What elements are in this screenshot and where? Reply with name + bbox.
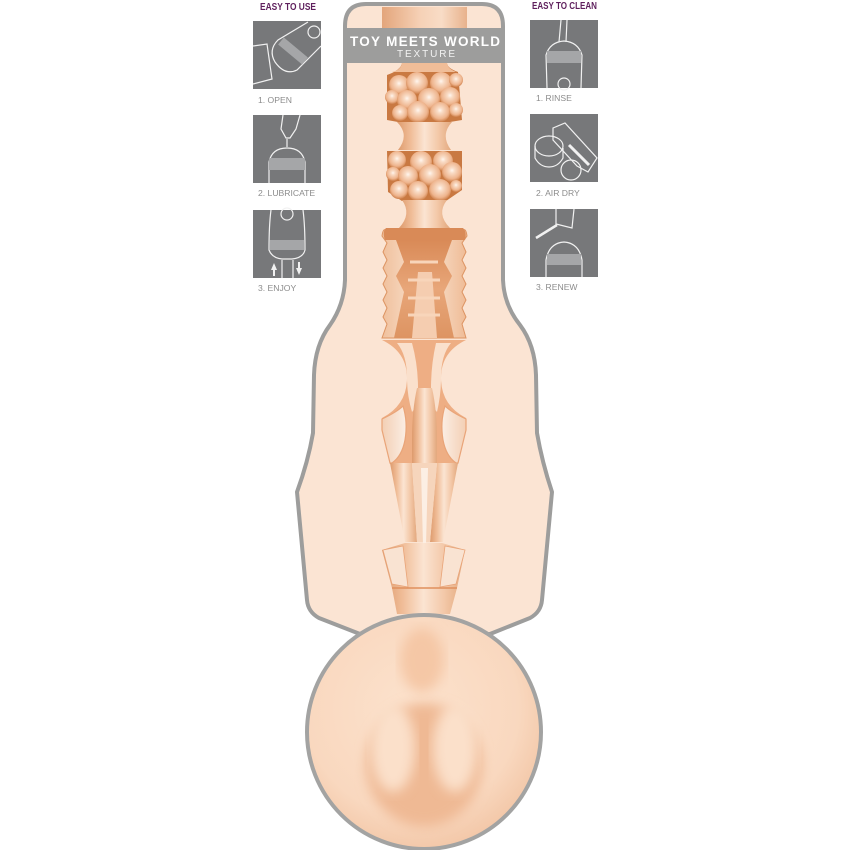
panel: step 1 rinse [530, 20, 598, 103]
panel: step 2 air dry [530, 114, 598, 198]
product body outline [297, 4, 552, 634]
circular close-up view [307, 615, 541, 849]
nub chamber lower [386, 151, 462, 201]
ribbed chamber [382, 228, 467, 338]
neck upper [397, 122, 452, 150]
heading: easy to clean: EASY TO CLEAN [532, 0, 597, 12]
top shaft [382, 7, 467, 29]
panel: step 1 open [253, 21, 321, 105]
panel: step 3 renew [530, 209, 598, 292]
side lobe left [382, 406, 406, 463]
panel: step 3 enjoy [253, 208, 321, 293]
nub chamber upper [385, 63, 463, 123]
subtitle: TEXTURE [397, 49, 455, 60]
title band [345, 28, 503, 63]
centre lobe [412, 388, 437, 463]
lower taper right strip [430, 463, 458, 542]
entrance flare [382, 543, 465, 614]
label: open: 1. OPEN [258, 95, 292, 105]
side ridges [397, 343, 418, 412]
label: enjoy: 3. ENJOY [258, 283, 296, 293]
abstract surface shading [400, 628, 444, 692]
neck lower [399, 200, 450, 228]
side lobe right [442, 406, 466, 463]
label: air dry: 2. AIR DRY [536, 188, 580, 198]
title: TOY MEETS WORLD [350, 34, 500, 49]
label: renew: 3. RENEW [536, 282, 578, 292]
heading: easy to use: EASY TO USE [260, 1, 316, 13]
lower taper centre strip [412, 463, 437, 542]
texture channel [382, 63, 467, 614]
panel: step 2 lubricate [253, 115, 321, 198]
label: rinse: 1. RINSE [536, 93, 572, 103]
lower taper left strip [390, 463, 417, 542]
central connector [382, 340, 466, 464]
label: lubricate: 2. LUBRICATE [258, 188, 315, 198]
